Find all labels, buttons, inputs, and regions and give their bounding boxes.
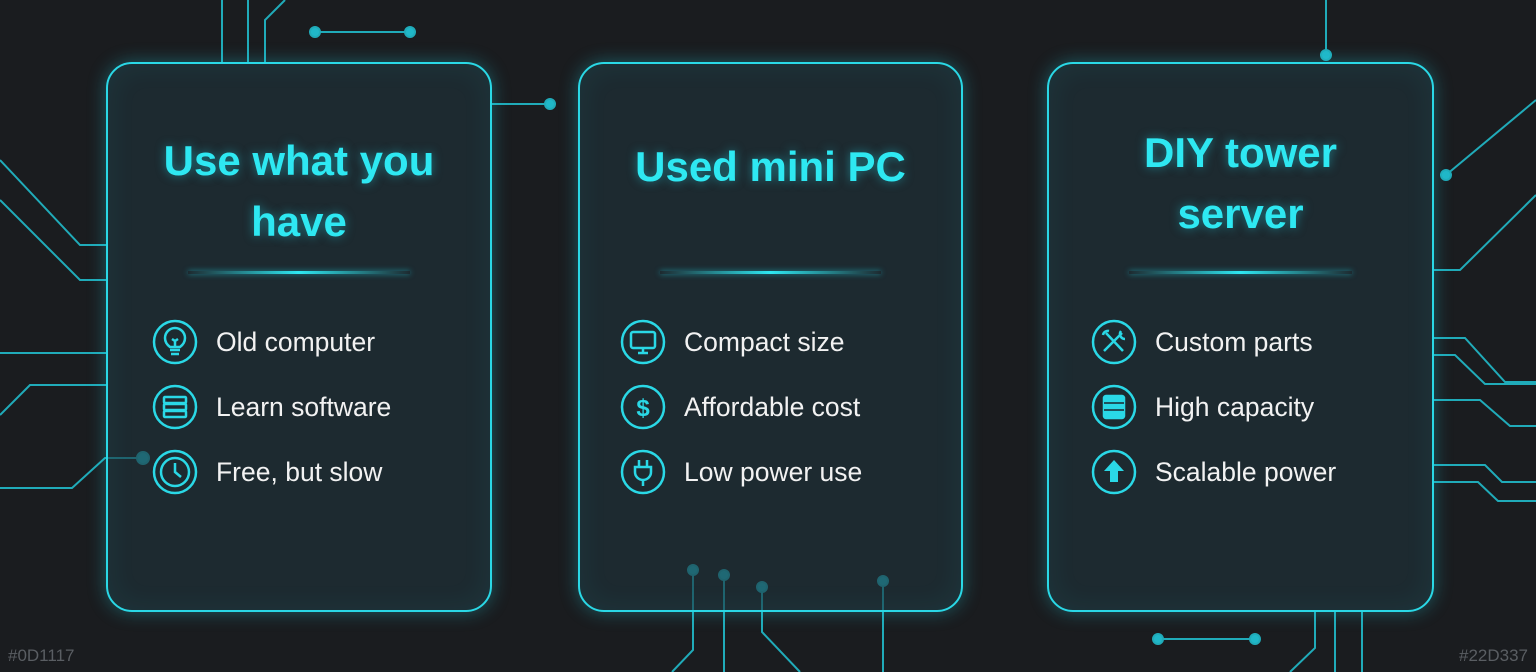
title: server <box>1177 190 1304 237</box>
item: affordable cost <box>620 384 860 430</box>
title: Used mini PC <box>635 143 906 190</box>
title: have <box>251 198 347 245</box>
title <box>160 137 438 245</box>
item: custom parts <box>1092 320 1313 364</box>
item: low power use: Low power use <box>684 456 862 486</box>
item: high capacity: High capacity <box>1155 392 1314 422</box>
item: high capacity <box>1092 384 1314 430</box>
hex label right: #22D337 <box>1459 646 1528 665</box>
item: custom parts: Custom parts <box>1155 326 1313 356</box>
panel: diy tower server <box>1047 62 1434 612</box>
item: scalable power: Scalable power <box>1155 456 1336 486</box>
item: old computer: Old computer <box>216 326 375 356</box>
panel: use what you have <box>106 62 492 612</box>
title <box>1140 129 1340 237</box>
title: Use what you <box>164 137 434 184</box>
item: low power use <box>620 450 862 494</box>
item: scalable power <box>1092 450 1336 494</box>
panel: used mini pc <box>578 62 963 612</box>
item: compact size <box>620 320 845 364</box>
item: affordable cost: $ <box>636 395 650 422</box>
item: old computer <box>152 320 375 364</box>
hex label left: #0D1117 <box>8 646 74 665</box>
item: affordable cost: Affordable cost <box>684 392 860 422</box>
item: free but slow <box>152 450 382 494</box>
title: DIY tower <box>1144 129 1337 176</box>
item: learn software <box>152 384 391 430</box>
item: compact size: Compact size <box>684 326 845 356</box>
item: learn software: Learn software <box>216 392 391 422</box>
item: free but slow: Free, but slow <box>216 456 382 486</box>
